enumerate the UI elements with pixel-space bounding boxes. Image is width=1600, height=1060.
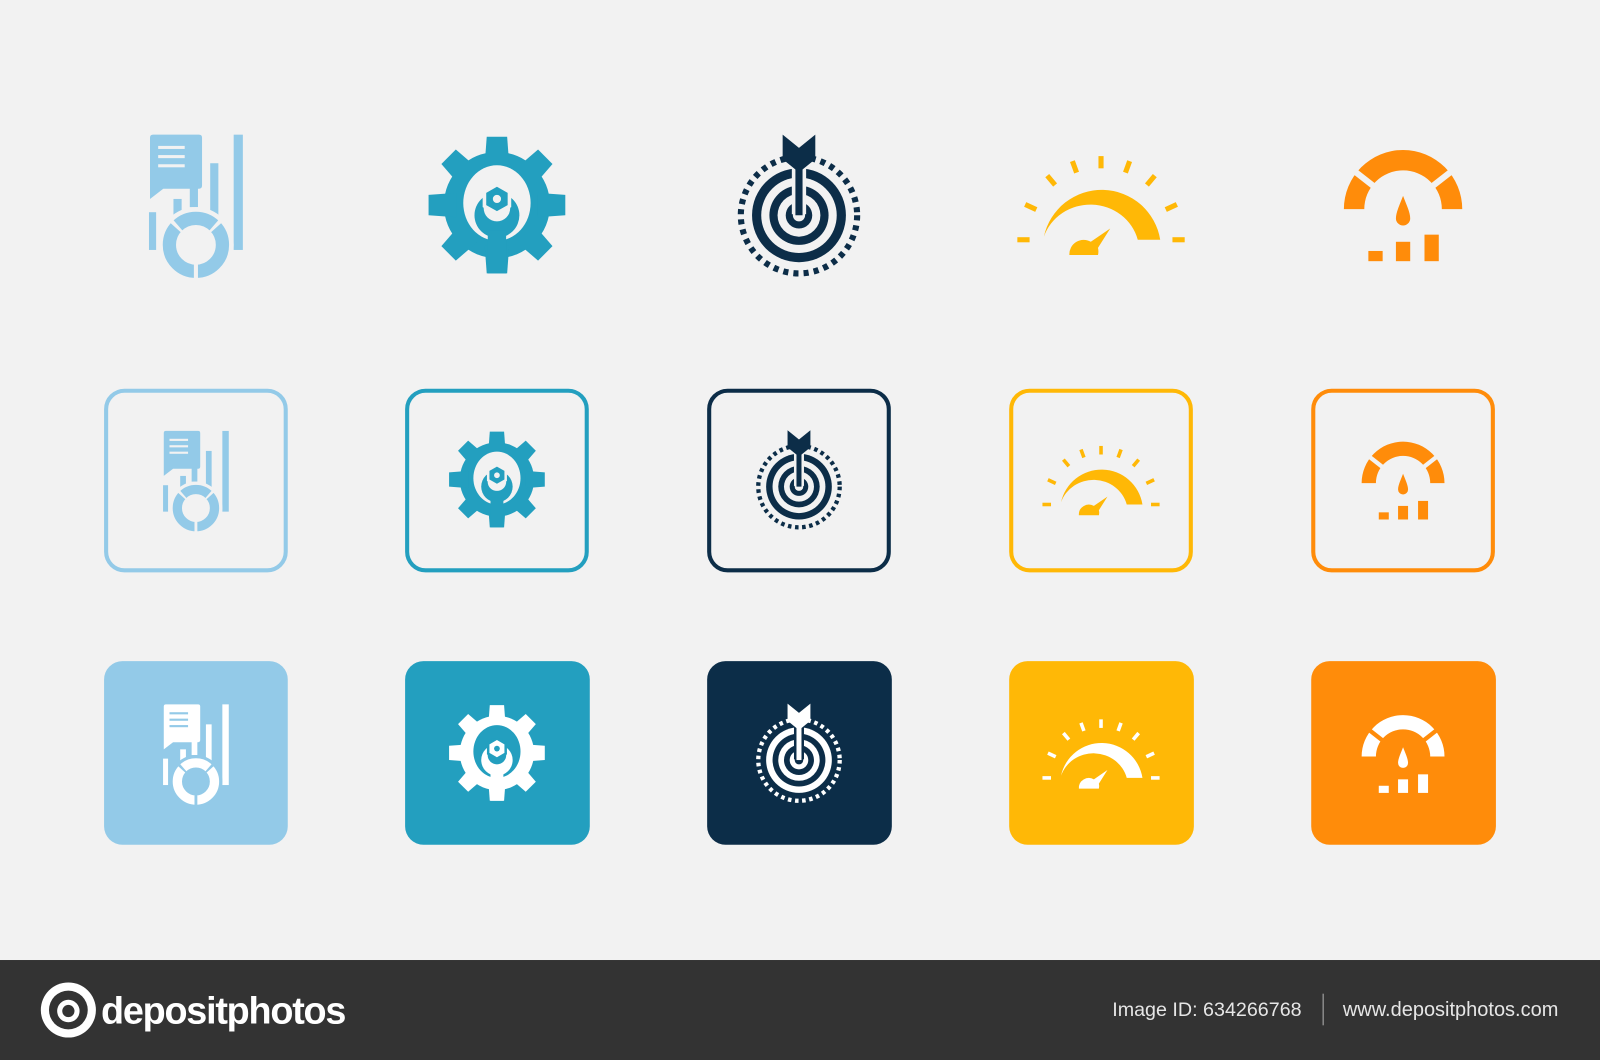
icon: gauge drop (row 1) (1344, 150, 1462, 261)
filled box: target (707, 661, 892, 845)
icon: gear wrench (row 1) (429, 137, 565, 273)
icon: target arrow (row 1) (741, 135, 857, 273)
image id: Image ID: 634266768 (1112, 999, 1302, 1021)
footer bar (0, 960, 1600, 1060)
outlined box: gear wrench (407, 391, 587, 570)
filled box: gear wrench (405, 661, 590, 845)
filled box: chart feedback (104, 661, 288, 845)
outlined box: chart feedback (106, 391, 286, 570)
icon: depositphotos logo (41, 982, 96, 1038)
outlined box: speedometer (1011, 391, 1191, 570)
outlined box: gauge (1313, 391, 1493, 570)
icon: speedometer (row 1) (1017, 156, 1185, 255)
filled box: speedometer (1009, 661, 1194, 845)
outlined box: target (709, 391, 889, 570)
icon: chart feedback (row 1) (149, 135, 243, 283)
filled box: gauge (1311, 661, 1496, 845)
website: www.depositphotos.com (1342, 999, 1558, 1021)
brand text: depositphotos (101, 989, 345, 1031)
